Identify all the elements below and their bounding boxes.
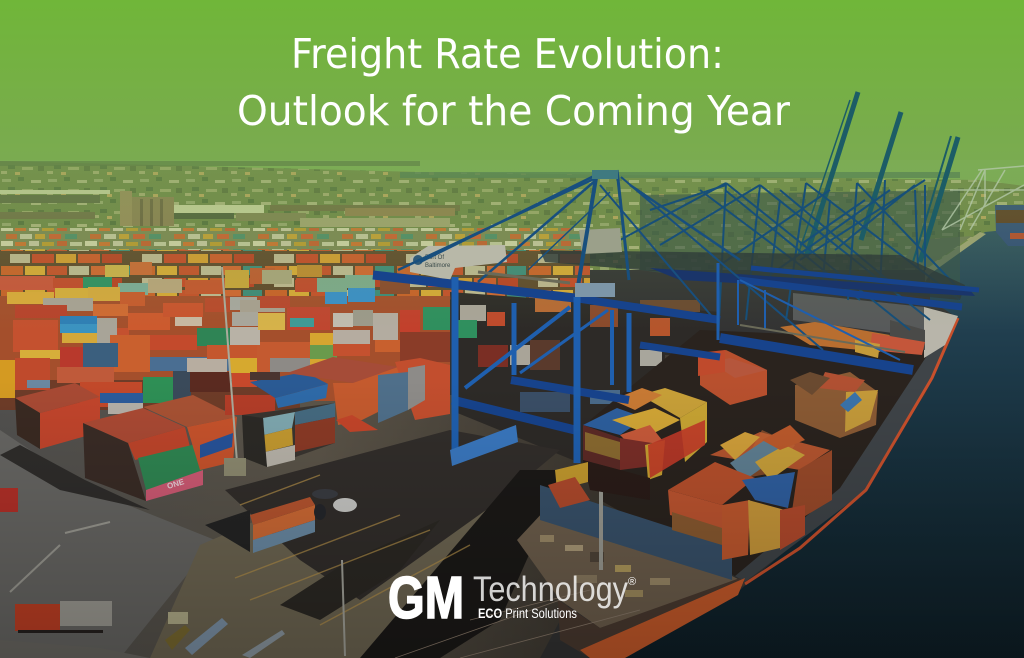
logo: GM Technology: ECO Print Solutions — [478, 606, 577, 621]
crane legs — [455, 263, 900, 463]
title: Freight Rate Evolution: — [291, 30, 724, 78]
logo: GM Technology: ® — [628, 576, 636, 588]
stack: blue tops — [250, 372, 328, 408]
rear crane structure — [620, 180, 962, 340]
silo building — [120, 191, 174, 226]
aft containers — [780, 322, 925, 358]
yard interior behind front crane — [450, 292, 720, 465]
boom beams — [373, 268, 979, 430]
pale distant cranes — [942, 166, 1024, 230]
bow mast — [599, 470, 603, 570]
near container stacks — [15, 357, 450, 501]
stack: ONE green and pink: ONE — [166, 477, 186, 491]
distant city land — [0, 161, 1024, 270]
mid container rows — [0, 262, 450, 414]
colour wash over horizon — [0, 160, 1024, 330]
hull side — [735, 316, 958, 582]
truck with containers — [15, 601, 112, 633]
terminal sign: Port of Baltimore: Port Of — [425, 255, 444, 261]
ship far right — [995, 205, 1024, 246]
hold interior dark — [590, 330, 930, 576]
stack: orange flat roofs — [287, 357, 450, 432]
port lot details — [0, 430, 560, 658]
bow deck — [517, 510, 740, 628]
bow bulwark — [540, 485, 732, 580]
logo: GM Technology — [388, 565, 636, 631]
yard light pole — [222, 267, 246, 476]
water — [610, 228, 1024, 658]
logo: GM Technology: GM — [388, 565, 464, 631]
crane walkways dark band — [540, 250, 975, 300]
terminal sign: Port of Baltimore — [410, 245, 507, 280]
logo: GM Technology: Technology — [473, 570, 628, 609]
machinery on walkway — [575, 283, 615, 297]
ground — [0, 395, 640, 658]
stack: multicolour — [225, 395, 335, 467]
parked cars — [312, 489, 357, 520]
forward container stacks — [698, 350, 767, 405]
title — [237, 30, 790, 135]
crane shadows on ground — [225, 430, 560, 600]
red waterline — [745, 318, 958, 584]
stack: orange left — [15, 383, 100, 449]
sky — [0, 0, 1024, 240]
terminal sign: Port of Baltimore: Baltimore — [425, 263, 451, 269]
white superstructure and gray container wall — [793, 293, 924, 337]
raised crane booms — [798, 92, 958, 262]
crane apex — [592, 170, 618, 179]
orange container on lot — [250, 497, 315, 553]
crane carriage — [450, 425, 518, 466]
left yard lighter pavement — [0, 430, 215, 658]
backdrop behind rear cranes — [640, 190, 960, 290]
bow hull — [558, 578, 745, 658]
crane stays — [398, 170, 823, 350]
front crane — [373, 170, 979, 466]
yellow lane lines — [235, 475, 470, 625]
dark wash over lower photo — [0, 380, 1024, 658]
red box on left edge — [0, 488, 18, 512]
far container field — [0, 228, 590, 410]
quay apron far right — [925, 232, 986, 282]
deck fittings — [540, 535, 670, 597]
yard vehicles — [165, 612, 285, 658]
stack: ONE green and pink — [83, 408, 203, 501]
title: Outlook for the Coming Year — [237, 87, 790, 135]
stack: orange with blue band — [143, 395, 237, 470]
container ship — [395, 293, 958, 658]
